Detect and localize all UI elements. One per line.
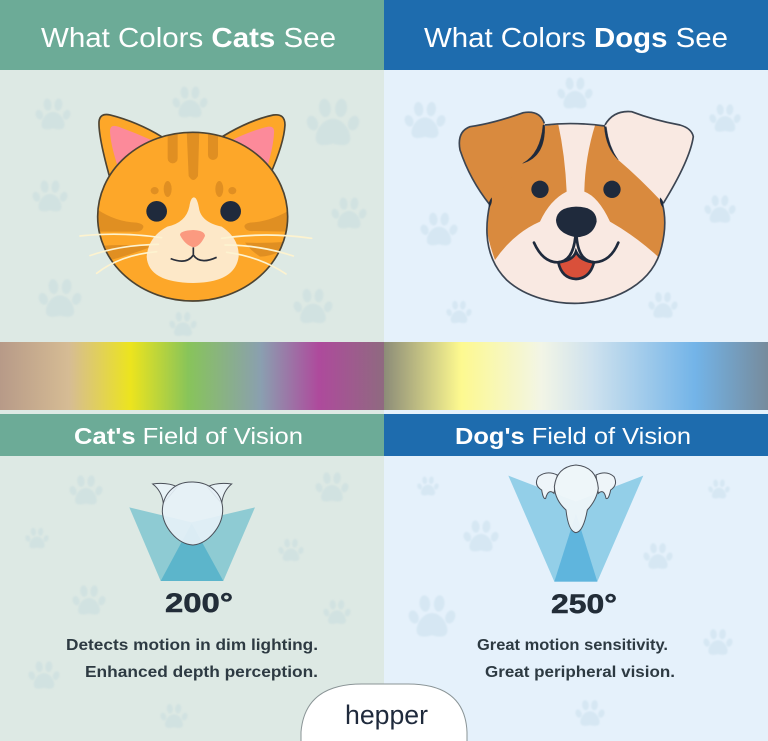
heading: dog's field of vision: Dog's Field of Vision [455,423,691,449]
number: 250 degrees: 250° [551,589,617,619]
text block: cat vision facts [66,637,318,681]
heading: cat's field of vision: Cat's Field of Vision [74,423,303,449]
background paw prints: cat side [24,86,368,728]
chart: dog field of vision cone [508,465,643,582]
chart: cat color spectrum [0,342,384,410]
text block: dog vision facts: Great motion sensitivity. [477,637,668,654]
background paw prints: dog side [403,77,742,726]
number: 200 degrees: 200° [165,588,233,618]
text block: dog vision facts [477,637,675,681]
heading: what colors dogs see: What Colors Dogs See [424,22,728,53]
chart: dog color spectrum [384,342,768,410]
icon: dog face [459,111,693,303]
text block: dog vision facts: Great peripheral vision. [485,664,675,681]
heading: what colors cats see [0,0,384,70]
text block: cat vision facts: Detects motion in dim lighting. [66,637,318,654]
heading: what colors cats see: What Colors Cats See [41,22,336,53]
text block: cat vision facts: Enhanced depth perception. [85,664,318,681]
icon: cat face [80,115,312,301]
heading: what colors dogs see [384,0,768,70]
logo: hepper badge [301,684,467,741]
panel: dog background [384,0,768,741]
panel: cat background [0,0,384,741]
chart: cat field of vision cone [129,482,255,581]
heading: dog's field of vision [384,414,768,456]
logo: hepper badge: hepper [345,700,428,730]
heading: cat's field of vision [0,414,384,456]
